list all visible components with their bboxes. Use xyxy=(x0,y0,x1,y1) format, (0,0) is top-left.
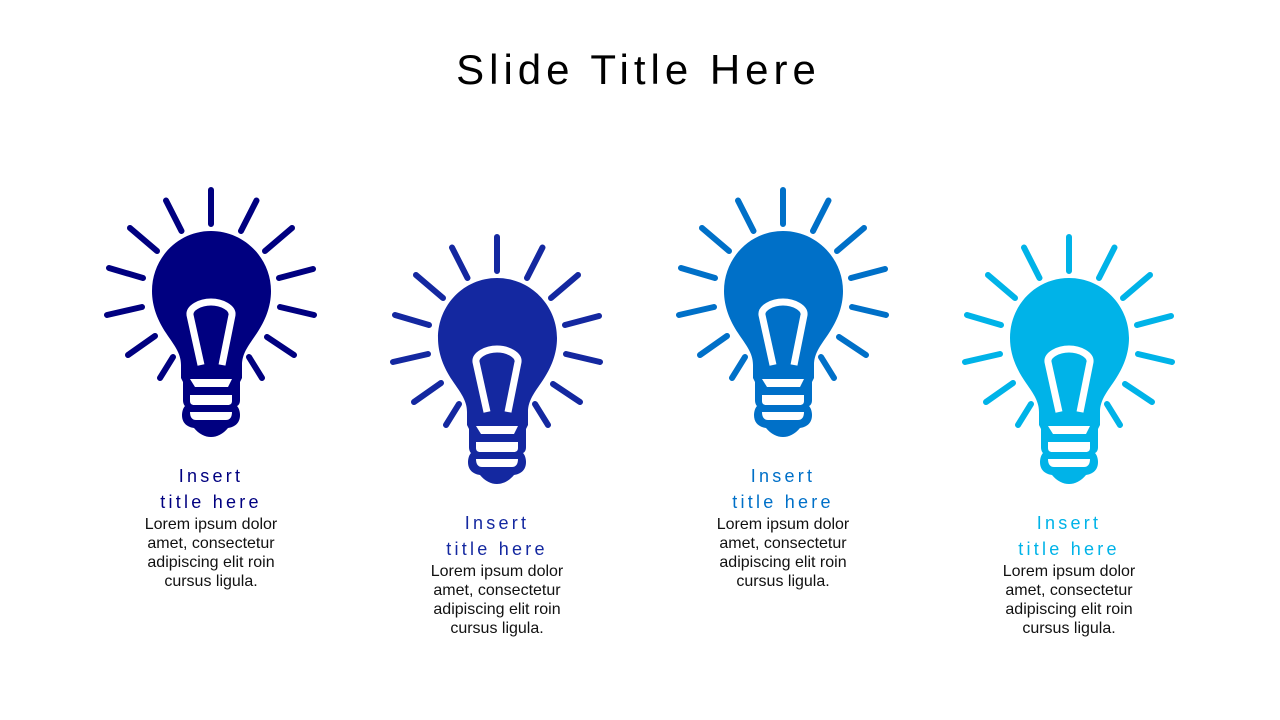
column 2 heading xyxy=(446,513,548,558)
column 3 heading: Insert xyxy=(751,466,815,486)
column 2 body: Lorem ipsum dolor xyxy=(431,562,563,580)
column 4 body xyxy=(1003,562,1135,637)
column 3 body: amet, consectetur xyxy=(719,535,847,552)
column 2 body: cursus ligula. xyxy=(450,620,544,637)
column 1 heading: title here xyxy=(160,492,262,512)
column 1 heading xyxy=(160,466,262,512)
column 4 heading: title here xyxy=(1018,538,1120,558)
icon: royal blue light bulb xyxy=(393,237,600,484)
icon: dark navy light bulb xyxy=(107,190,314,437)
column 4 heading: Insert xyxy=(1037,513,1101,533)
column 2 body xyxy=(431,562,563,637)
column 4 body: amet, consectetur xyxy=(1005,582,1133,599)
column 1 body: Lorem ipsum dolor xyxy=(145,516,277,532)
text block: column 2 xyxy=(431,513,563,637)
column 3 body: adipiscing elit roin xyxy=(719,554,847,571)
column 2 body: amet, consectetur xyxy=(433,582,561,599)
column 2 heading: Insert xyxy=(465,513,529,533)
column 3 heading: title here xyxy=(732,492,834,512)
column 3 body: cursus ligula. xyxy=(736,573,830,590)
column 4 body: cursus ligula. xyxy=(1022,620,1116,637)
column 3 body: Lorem ipsum dolor xyxy=(717,516,849,532)
column 2 body: adipiscing elit roin xyxy=(433,601,561,618)
text block: column 4 xyxy=(1003,513,1135,637)
column 4 body: adipiscing elit roin xyxy=(1005,601,1133,618)
column 1 heading: Insert xyxy=(179,466,243,486)
column 1 body: adipiscing elit roin xyxy=(147,554,275,571)
text block: column 3 xyxy=(717,466,849,590)
icon: medium blue light bulb xyxy=(679,190,886,437)
column 1 body xyxy=(145,516,277,590)
column 4 heading xyxy=(1018,513,1120,558)
column 3 body xyxy=(717,516,849,590)
title: Slide Title Here xyxy=(456,46,821,93)
text block: column 1 xyxy=(145,466,277,590)
column 2 heading: title here xyxy=(446,538,548,558)
column 1 body: amet, consectetur xyxy=(147,535,275,552)
column 4 body: Lorem ipsum dolor xyxy=(1003,562,1135,580)
column 3 heading xyxy=(732,466,834,512)
column 1 body: cursus ligula. xyxy=(164,573,258,590)
icon: cyan light bulb xyxy=(965,237,1172,484)
